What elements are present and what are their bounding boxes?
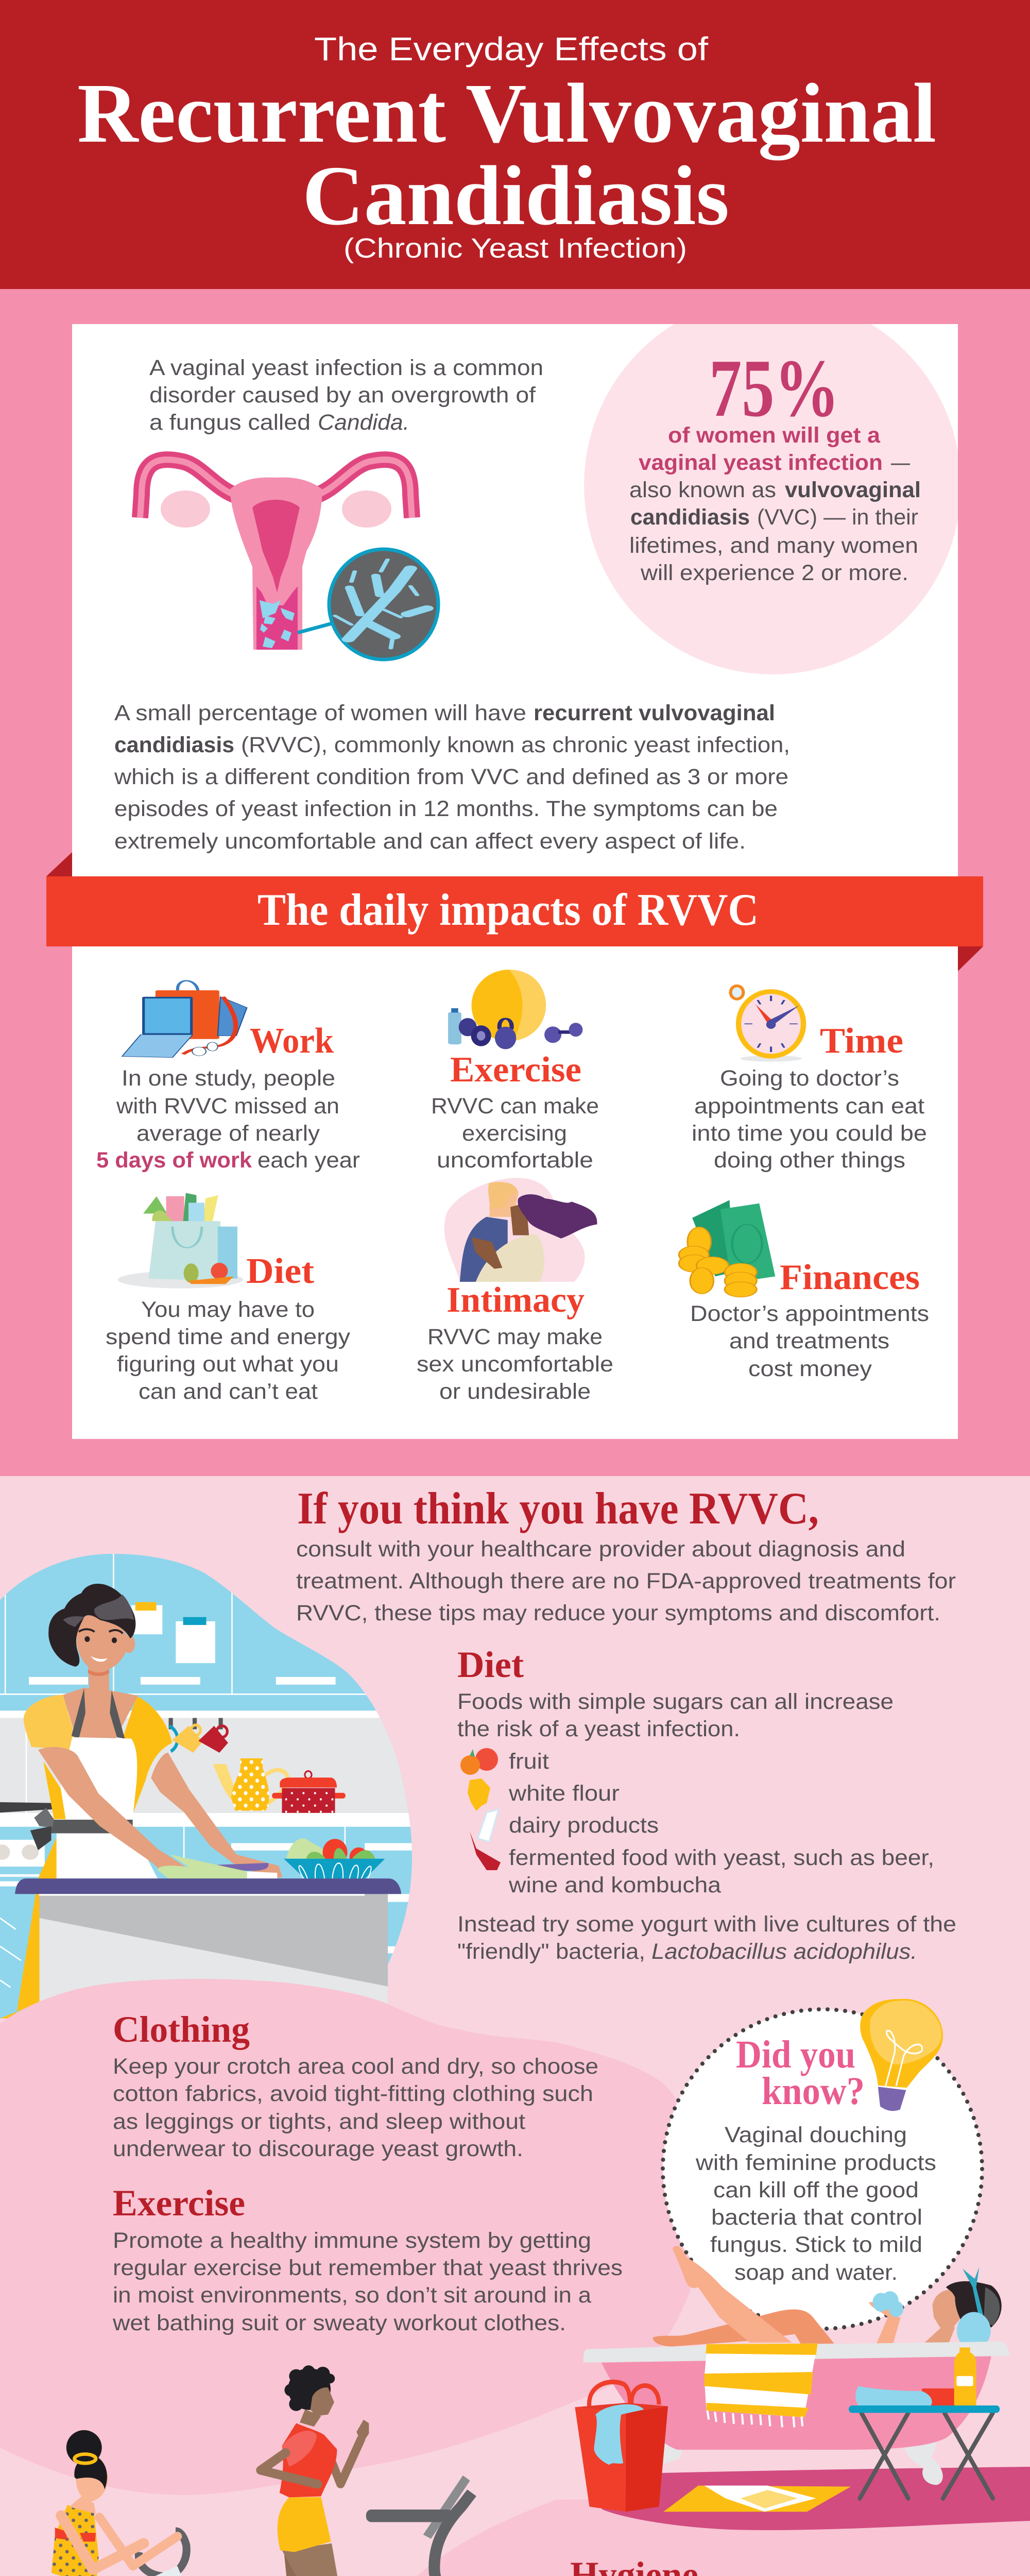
text: RVVC definition: candidiasis xyxy=(114,733,234,757)
text: exercise tip: Promote a healthy immune system by getting xyxy=(113,2228,591,2253)
text: clothing xyxy=(113,2054,598,2161)
text: diet xyxy=(106,1297,351,1404)
text: consult your provider: treatment. Although there are no FDA-approved treatments for xyxy=(296,1569,956,1594)
callout: did you know, douching xyxy=(663,2009,982,2329)
floor under bathtub xyxy=(602,2467,1030,2530)
bathtub xyxy=(602,2356,991,2485)
text: simple sugars: the risk of a yeast infection. xyxy=(457,1717,740,1741)
text: diet: figuring out what you xyxy=(117,1352,339,1377)
stat: 75 percent: also known as xyxy=(629,478,776,502)
text: diet: can and can’t eat xyxy=(139,1379,318,1404)
runner xyxy=(202,2365,369,2576)
text: fermented foods: wine and kombucha xyxy=(508,1873,721,1897)
text: RVVC definition xyxy=(114,701,790,854)
text: time: Going to doctor’s xyxy=(720,1066,899,1091)
text: consult your provider: RVVC, these tips may reduce your symptoms and discomfort. xyxy=(296,1601,940,1625)
text: diet: You may have to xyxy=(141,1297,315,1322)
heading: exercise tip: Exercise xyxy=(113,2182,245,2224)
title: main line two: Candidiasis xyxy=(302,148,729,243)
icon: laptop and bag xyxy=(122,981,247,1058)
panel: intro and daily impacts xyxy=(72,296,961,1439)
text: intimacy: RVVC may make xyxy=(427,1325,603,1349)
text: exercise tip: wet bathing suit or sweaty workout clothes. xyxy=(112,2311,566,2335)
text: yogurt advice: Lactobacillus acidophilus. xyxy=(651,1939,917,1964)
text: dairy products: dairy products xyxy=(509,1813,659,1838)
text: yeast infection definition: A vaginal yeast infection is a common xyxy=(149,355,543,380)
text: RVVC definition: recurrent vulvovaginal xyxy=(534,701,775,725)
heading: clothing: Clothing xyxy=(113,2009,250,2050)
text: simple sugars: Foods with simple sugars can all increase xyxy=(457,1689,894,1714)
text: fermented foods xyxy=(508,1845,934,1897)
text: finances xyxy=(690,1301,929,1381)
text: intimacy: or undesirable xyxy=(439,1379,591,1404)
text: consult your provider xyxy=(296,1537,956,1625)
stat: 75 percent: (VVC) — in their xyxy=(757,505,918,530)
striped towel xyxy=(704,2344,817,2427)
tip: clothing xyxy=(113,2009,598,2161)
stat: 75 percent: vaginal yeast infection xyxy=(639,450,883,475)
stat: 75 percent: lifetimes, and many women xyxy=(629,533,918,558)
icon: kissing couple xyxy=(444,1178,597,1282)
polka pot xyxy=(272,1771,346,1813)
text: fruit: fruit xyxy=(509,1749,549,1774)
title: main line one: Recurrent Vulvovaginal xyxy=(77,66,936,161)
icon: grocery bag xyxy=(118,1193,243,1289)
tip: exercise xyxy=(112,2182,623,2335)
text: fermented foods: fermented food with yeast, such as beer, xyxy=(509,1845,934,1870)
impact: time xyxy=(692,985,927,1173)
pink background section xyxy=(0,289,1030,1476)
illustration: woman in kitchen xyxy=(0,1549,420,2030)
heading: diet tip: Diet xyxy=(457,1644,524,1685)
text: work: each year xyxy=(258,1148,360,1173)
text: douching: bacteria that control xyxy=(711,2205,922,2230)
text: time xyxy=(692,1066,927,1173)
icon: milk bottle xyxy=(478,1809,499,1842)
ribbon heading: the daily impacts xyxy=(46,852,983,971)
text: exercise: exercising xyxy=(462,1121,567,1146)
illustration: gym xyxy=(0,2365,529,2576)
text: time: appointments can eat xyxy=(694,1094,924,1118)
text: exercise tip xyxy=(112,2228,623,2335)
stat: 75 percent: 75% xyxy=(709,342,839,434)
heading: diet: Diet xyxy=(246,1251,314,1291)
callout circle background xyxy=(584,296,961,674)
stat: 75 percent: candidiasis xyxy=(630,505,750,530)
impact: diet xyxy=(106,1193,351,1404)
text: douching: fungus. Stick to mild xyxy=(710,2232,922,2257)
heading: did you know: know? xyxy=(762,2070,865,2113)
text: douching xyxy=(695,2123,936,2285)
text: exercise: uncomfortable xyxy=(437,1148,593,1173)
impact: intimacy xyxy=(417,1178,613,1404)
text: clothing: Keep your crotch area cool and dry, so choose xyxy=(113,2054,598,2079)
heading: exercise: Exercise xyxy=(450,1050,581,1090)
ribbon heading: the daily impacts: The daily impacts of RVVC xyxy=(258,885,759,935)
text: finances: Doctor’s appointments xyxy=(690,1301,929,1326)
rug xyxy=(663,2486,851,2512)
icon: light bulb xyxy=(860,1999,943,2111)
text: work: 5 days of work xyxy=(96,1148,252,1173)
text: diet: spend time and energy xyxy=(106,1325,351,1349)
side table with bath items xyxy=(849,2348,1000,2498)
woman on bike xyxy=(40,2430,177,2576)
tub rim xyxy=(583,2342,1009,2363)
text: douching: Vaginal douching xyxy=(725,2123,907,2147)
impact: finances xyxy=(679,1200,929,1381)
woman figure xyxy=(0,1584,282,2019)
text: work: with RVVC missed an xyxy=(116,1094,339,1118)
text: time: doing other things xyxy=(714,1148,905,1173)
teapot xyxy=(213,1758,287,1810)
text: douching: soap and water. xyxy=(734,2260,898,2285)
heading: did you know xyxy=(736,2033,865,2113)
text: finances: and treatments xyxy=(729,1329,889,1353)
text: white flour: white flour xyxy=(508,1781,620,1806)
header banner xyxy=(0,0,1030,289)
text: consult your provider: consult with your healthcare provider about diagnosis and xyxy=(296,1537,905,1562)
text: yeast infection definition: Candida. xyxy=(318,410,409,435)
icon: fruit xyxy=(460,1748,498,1775)
heading: if you think you have RVVC: If you think you have RVVC, xyxy=(297,1484,819,1534)
illustration: woman in bathtub xyxy=(575,1999,1009,2512)
icon: wheat xyxy=(468,1778,490,1811)
text: yeast infection definition: a fungus called xyxy=(149,410,311,435)
text: clothing: as leggings or tights, and sleep without xyxy=(113,2109,525,2134)
tip: diet xyxy=(457,1644,956,1964)
text: work xyxy=(96,1066,360,1173)
text: yogurt advice: Instead try some yogurt with live cultures of the xyxy=(457,1912,956,1937)
medium pink blob, upper xyxy=(0,1979,700,2495)
text: yeast infection definition: disorder caused by an overgrowth of xyxy=(149,383,536,408)
text: RVVC definition: extremely uncomfortable and can affect every aspect of life. xyxy=(114,829,746,854)
bathing woman xyxy=(653,2246,1002,2349)
text: RVVC definition: episodes of yeast infection in 12 months. The symptoms can be xyxy=(114,796,778,821)
text: exercise xyxy=(431,1094,599,1173)
heading: intimacy: Intimacy xyxy=(447,1280,585,1320)
icon: wine bottle xyxy=(470,1832,501,1870)
tips section background xyxy=(0,1476,1030,2576)
text: exercise: RVVC can make xyxy=(431,1094,599,1118)
text: work: average of nearly xyxy=(136,1121,320,1146)
mugs on hooks xyxy=(169,1718,228,1753)
icon: uterus with yeast overgrowth xyxy=(140,460,438,659)
text: yeast infection definition xyxy=(149,355,543,435)
text: douching: with feminine products xyxy=(695,2150,936,2175)
treadmill xyxy=(195,2476,483,2576)
text: exercise tip: in moist environments, so don’t sit around in a xyxy=(113,2283,591,2308)
stat: 75 percent xyxy=(629,342,921,585)
text: douching: can kill off the good xyxy=(713,2178,919,2202)
icon: clock xyxy=(729,985,806,1062)
text: intimacy: sex uncomfortable xyxy=(417,1352,613,1377)
stat: 75 percent: — xyxy=(891,450,910,475)
salad bowl xyxy=(284,1838,385,1878)
stat: 75 percent: vulvovaginal xyxy=(785,478,921,502)
heading: did you know: Did you xyxy=(736,2033,855,2076)
medium pink blob, lower xyxy=(335,2473,1030,2576)
impact: exercise xyxy=(431,970,599,1173)
text: work: In one study, people xyxy=(122,1066,335,1091)
text: yogurt advice xyxy=(457,1912,956,1964)
text: RVVC definition: which is a different condition from VVC and defined as 3 or more xyxy=(114,765,788,789)
heading: work: Work xyxy=(250,1021,334,1061)
text: clothing: cotton fabrics, avoid tight-fitting clothing such xyxy=(113,2081,593,2106)
heading: time: Time xyxy=(820,1021,903,1061)
text: time: into time you could be xyxy=(692,1121,927,1146)
kitchen counter xyxy=(15,1878,401,2004)
text: RVVC definition: (RVVC), commonly known as chronic yeast infection, xyxy=(241,733,790,757)
text: RVVC definition: A small percentage of women will have xyxy=(114,701,526,725)
text: intimacy xyxy=(417,1325,613,1404)
impact: work xyxy=(96,981,360,1173)
exercise bike xyxy=(0,2531,197,2576)
text: clothing: underwear to discourage yeast growth. xyxy=(113,2137,523,2161)
title: subtitle: (Chronic Yeast Infection) xyxy=(344,233,687,264)
icon: ball and weights xyxy=(448,970,582,1049)
text: finances: cost money xyxy=(748,1357,872,1381)
laundry basket xyxy=(575,2382,668,2512)
text: simple sugars xyxy=(457,1689,894,1741)
title: kicker: The Everyday Effects of xyxy=(314,30,708,67)
heading: finances: Finances xyxy=(780,1258,920,1297)
text: yogurt advice: "friendly" bacteria, xyxy=(457,1939,645,1964)
icon: money and coins xyxy=(679,1200,775,1297)
stat: 75 percent: will experience 2 or more. xyxy=(640,561,908,585)
text: exercise tip: regular exercise but remember that yeast thrives xyxy=(113,2256,623,2280)
stat: 75 percent: of women will get a xyxy=(668,423,881,448)
